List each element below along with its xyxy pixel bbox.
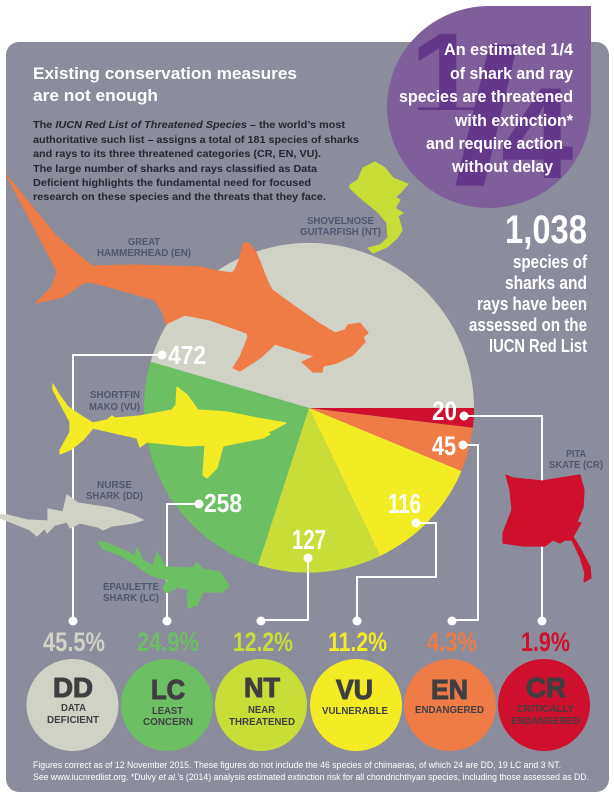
connector lines xyxy=(73,355,542,621)
callout: purple one-quarter bubble: with extinction* xyxy=(454,111,573,130)
text block: total species assessed: sharks and xyxy=(505,273,587,293)
percentages: 4.3% xyxy=(427,627,477,657)
pie value labels: 20 xyxy=(432,396,457,426)
text block: introduction xyxy=(33,119,359,203)
pie value labels xyxy=(168,340,457,555)
species labels: SHORTFIN xyxy=(90,390,140,401)
text block: total species assessed: 1,038 xyxy=(505,208,587,252)
text block: introduction: The IUCN Red List of Threatened Species – the world’s most xyxy=(33,119,346,131)
text block: introduction: The large number of sharks and rays classified as Data xyxy=(33,163,317,175)
category: near threatened: THREATENED xyxy=(229,716,295,728)
category: least concern: LEAST xyxy=(152,705,184,717)
callout: purple one-quarter bubble: An estimated 1/4 xyxy=(444,40,574,59)
pie value labels: 258 xyxy=(204,488,242,518)
category: endangered: ENDANGERED xyxy=(415,704,484,716)
category: endangered: EN xyxy=(431,674,468,705)
species labels: GREAT xyxy=(128,237,160,248)
pie value labels: 127 xyxy=(292,524,326,555)
category: least concern xyxy=(121,659,213,751)
text block: introduction: authoritative such list – assigns a total of 181 species of sharks xyxy=(33,134,359,146)
text block: introduction: Deficient highlights the fundamental need for focused xyxy=(33,177,311,189)
pie value labels: 45 xyxy=(432,431,456,461)
heading: Existing conservation measures xyxy=(33,64,297,83)
heading: are not enough xyxy=(33,86,158,105)
category: critically endangered: CR xyxy=(526,672,566,703)
callout: purple one-quarter bubble: without delay xyxy=(451,157,553,176)
category: data deficient: DATA xyxy=(61,702,86,714)
percentages: 11.2% xyxy=(328,627,387,657)
percentages: 45.5% xyxy=(43,627,105,657)
callout: purple one-quarter bubble: 1 xyxy=(410,8,480,147)
category: endangered xyxy=(404,659,496,751)
percentages: 12.2% xyxy=(233,627,293,657)
footnote: See www.iucnredlist.org. *Dulvy et al.’s (2014) analysis estimated extinction risk for all chondrichthyan species, including those assessed as DD. xyxy=(33,772,589,782)
category: data deficient: DD xyxy=(53,672,93,703)
category: data deficient xyxy=(26,659,118,751)
text block: total species assessed: species of xyxy=(513,252,588,272)
category: vulnerable: VULNERABLE xyxy=(322,705,388,717)
callout: purple one-quarter bubble: of shark and ray xyxy=(450,64,574,83)
percentages: 1.9% xyxy=(521,627,570,657)
callout: purple one-quarter bubble xyxy=(387,6,591,223)
footnote: Figures correct as of 12 November 2015. These figures do not include the 46 species of chimaeras, of which 24 are DD, 19 LC and 3 NT. xyxy=(33,760,561,770)
text block: introduction: and rays to its three threatened categories (CR, EN, VU). xyxy=(33,148,321,160)
callout: purple one-quarter bubble: / xyxy=(453,11,520,223)
species labels xyxy=(86,216,603,604)
icon: epaulette shark xyxy=(98,542,229,608)
category: least concern: CONCERN xyxy=(143,716,193,728)
category: near threatened xyxy=(215,659,307,751)
percentages: 24.9% xyxy=(137,627,199,657)
species labels: SHARK (LC) xyxy=(103,593,159,604)
heading xyxy=(33,64,297,105)
text block: introduction: research on these species and the threats that they face. xyxy=(33,191,326,203)
species labels: PITA xyxy=(566,449,586,460)
species labels: SKATE (CR) xyxy=(549,460,603,471)
category: least concern: LC xyxy=(151,674,185,705)
species labels: MAKO (VU) xyxy=(89,402,140,413)
category: vulnerable: VU xyxy=(336,674,373,705)
pie value labels: 472 xyxy=(168,340,206,370)
species labels: SHARK (DD) xyxy=(86,491,143,502)
category: critically endangered xyxy=(498,659,590,751)
pie chart xyxy=(144,243,474,573)
text block: total species assessed: rays have been xyxy=(477,294,587,314)
category: data deficient: DEFICIENT xyxy=(47,714,100,726)
callout: purple one-quarter bubble: and require action xyxy=(426,134,563,153)
species labels: GUITARFISH (NT) xyxy=(300,227,381,238)
species labels: EPAULETTE xyxy=(103,582,159,593)
species labels: SHOVELNOSE xyxy=(307,216,374,227)
icon: shovelnose guitarfish xyxy=(350,162,408,253)
species labels: HAMMERHEAD (EN) xyxy=(97,248,191,259)
icon: great hammerhead xyxy=(7,176,368,372)
callout: purple one-quarter bubble: 4 xyxy=(501,60,573,206)
text block: total species assessed: assessed on the xyxy=(469,315,587,335)
category: near threatened: NEAR xyxy=(248,704,275,716)
footnote xyxy=(33,760,589,782)
icon: shortfin mako xyxy=(53,384,286,478)
category: critically endangered: ENDANGERED xyxy=(511,715,580,727)
category: vulnerable xyxy=(310,659,402,751)
callout: purple one-quarter bubble: species are threatened xyxy=(399,87,573,106)
pie value labels: 116 xyxy=(388,488,421,519)
connector dots xyxy=(68,350,546,626)
category: near threatened: NT xyxy=(244,672,280,703)
category: critically endangered: CRITICALLY xyxy=(517,703,574,715)
percentages xyxy=(43,627,570,657)
text block: total species assessed xyxy=(469,208,588,356)
icon: pita skate xyxy=(503,475,591,582)
icon: nurse shark xyxy=(0,495,143,536)
species labels: NURSE xyxy=(97,480,132,491)
text block: total species assessed: IUCN Red List xyxy=(489,336,587,356)
